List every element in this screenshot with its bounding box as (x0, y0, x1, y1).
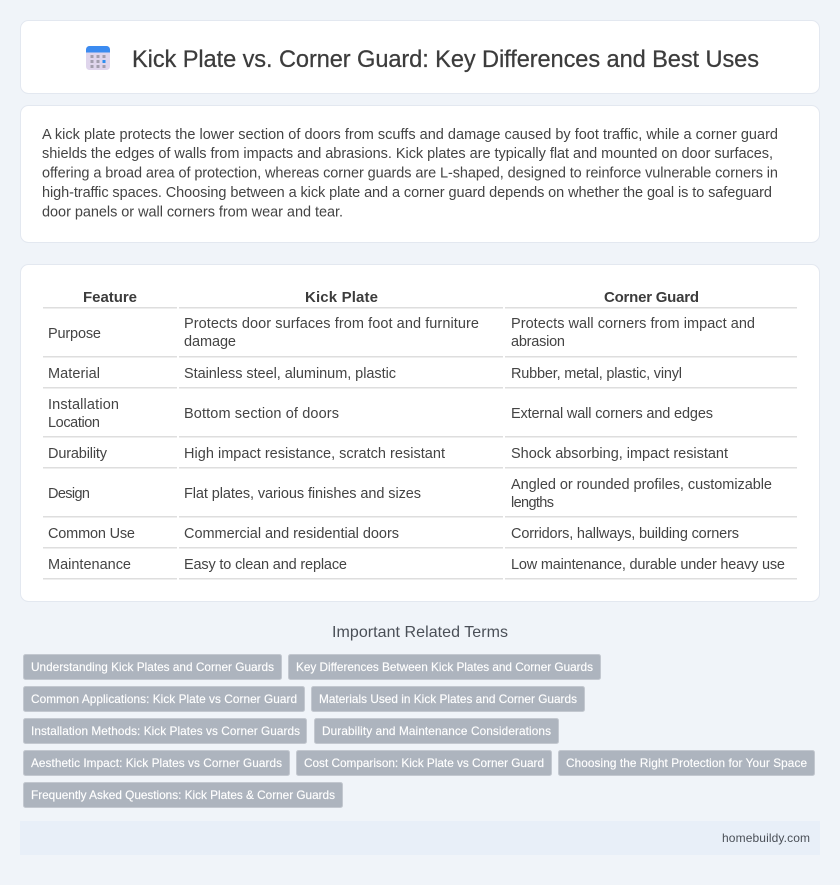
row: purpose (48, 316, 755, 350)
table header row: Feature (83, 289, 137, 306)
text block: introduction paragraph: door panels or wall corners from wear and tear. (42, 204, 343, 220)
row: common use: Common Use (48, 526, 135, 542)
row: purpose: damage (184, 334, 236, 350)
row: installation location: Bottom section of doors (184, 406, 339, 422)
row: maintenance: Easy to clean and replace (184, 557, 347, 573)
row: common use: Commercial and residential doors (184, 526, 399, 542)
text block: introduction paragraph: A kick plate protects the lower section of doors from scuffs and damage caused by foot traffic, while a corner guard (42, 127, 778, 143)
panel: related term tags: Frequently Asked Questions: Kick Plates & Corner Guards (31, 788, 335, 802)
footer bar (20, 821, 820, 855)
row: maintenance: Low maintenance, durable under heavy use (511, 557, 785, 573)
row: design: Design (48, 486, 90, 502)
row: installation location (48, 397, 713, 431)
row: design (48, 477, 772, 511)
footer source text: homebuildy.com (722, 831, 810, 845)
header panel (20, 20, 820, 94)
table header row: Kick Plate (305, 289, 378, 306)
panel: related term tags: Common Applications: Kick Plate vs Corner Guard (31, 692, 297, 706)
row: design: Angled or rounded profiles, customizable (511, 477, 772, 493)
text block: introduction paragraph: offering a broad area of protection, whereas corner guards are L-shaped, designed to reinforce vulnerable corners in (42, 166, 778, 182)
panel: related term tags: Cost Comparison: Kick Plate vs Corner Guard (304, 756, 544, 770)
row: material (48, 366, 682, 382)
row: material: Stainless steel, aluminum, plastic (184, 366, 396, 382)
row: purpose: Protects wall corners from impact and (511, 316, 755, 332)
row: purpose: abrasion (511, 334, 565, 350)
text block: introduction paragraph: high-traffic spaces. Choosing between a kick plate and a corner guard depends on whether the goal is to safeguard (42, 185, 772, 201)
row: maintenance (48, 557, 785, 573)
panel: related term tags: Materials Used in Kick Plates and Corner Guards (319, 692, 577, 706)
panel: related term tags: Choosing the Right Protection for Your Space (566, 756, 807, 770)
panel: related term tags (24, 654, 814, 808)
row: material: Rubber, metal, plastic, vinyl (511, 366, 682, 382)
heading: important related terms: Important Related Terms (332, 624, 508, 641)
row: common use: Corridors, hallways, building corners (511, 526, 739, 542)
row: durability: High impact resistance, scratch resistant (184, 446, 445, 462)
row: installation location: External wall corners and edges (511, 406, 713, 422)
title: Kick Plate vs. Corner Guard: Key Differences and Best Uses (132, 47, 759, 73)
panel: related term tags: Aesthetic Impact: Kick Plates vs Corner Guards (31, 756, 282, 770)
text block: introduction paragraph: shields the edges of walls from impacts and abrasions. Kick plates are typically flat and mounted on door surfaces, (42, 146, 773, 162)
row: material: Material (48, 366, 100, 382)
row: purpose: Purpose (48, 326, 101, 342)
row: installation location: Installation (48, 397, 119, 413)
row: installation location: Location (48, 415, 100, 431)
panel: related term tags: Understanding Kick Plates and Corner Guards (31, 660, 274, 674)
panel: related term tags: Key Differences Between Kick Plates and Corner Guards (296, 660, 593, 674)
row: durability: Durability (48, 446, 108, 462)
row: durability (48, 446, 728, 462)
table header row (83, 289, 699, 306)
row: maintenance: Maintenance (48, 557, 131, 573)
icon: calendar (86, 46, 110, 70)
panel: related term tags: Installation Methods: Kick Plates vs Corner Guards (31, 724, 300, 738)
row: design: Flat plates, various finishes and sizes (184, 486, 421, 502)
panel: related term tags: Durability and Maintenance Considerations (322, 724, 551, 738)
text block: introduction paragraph (42, 127, 778, 220)
panel: comparison table (20, 264, 820, 602)
row: design: lengths (511, 495, 554, 511)
row: purpose: Protects door surfaces from foot and furniture (184, 316, 479, 332)
row: common use (48, 526, 739, 542)
row: durability: Shock absorbing, impact resistant (511, 446, 728, 462)
panel: introduction (20, 106, 820, 242)
table header row: Corner Guard (604, 289, 699, 306)
